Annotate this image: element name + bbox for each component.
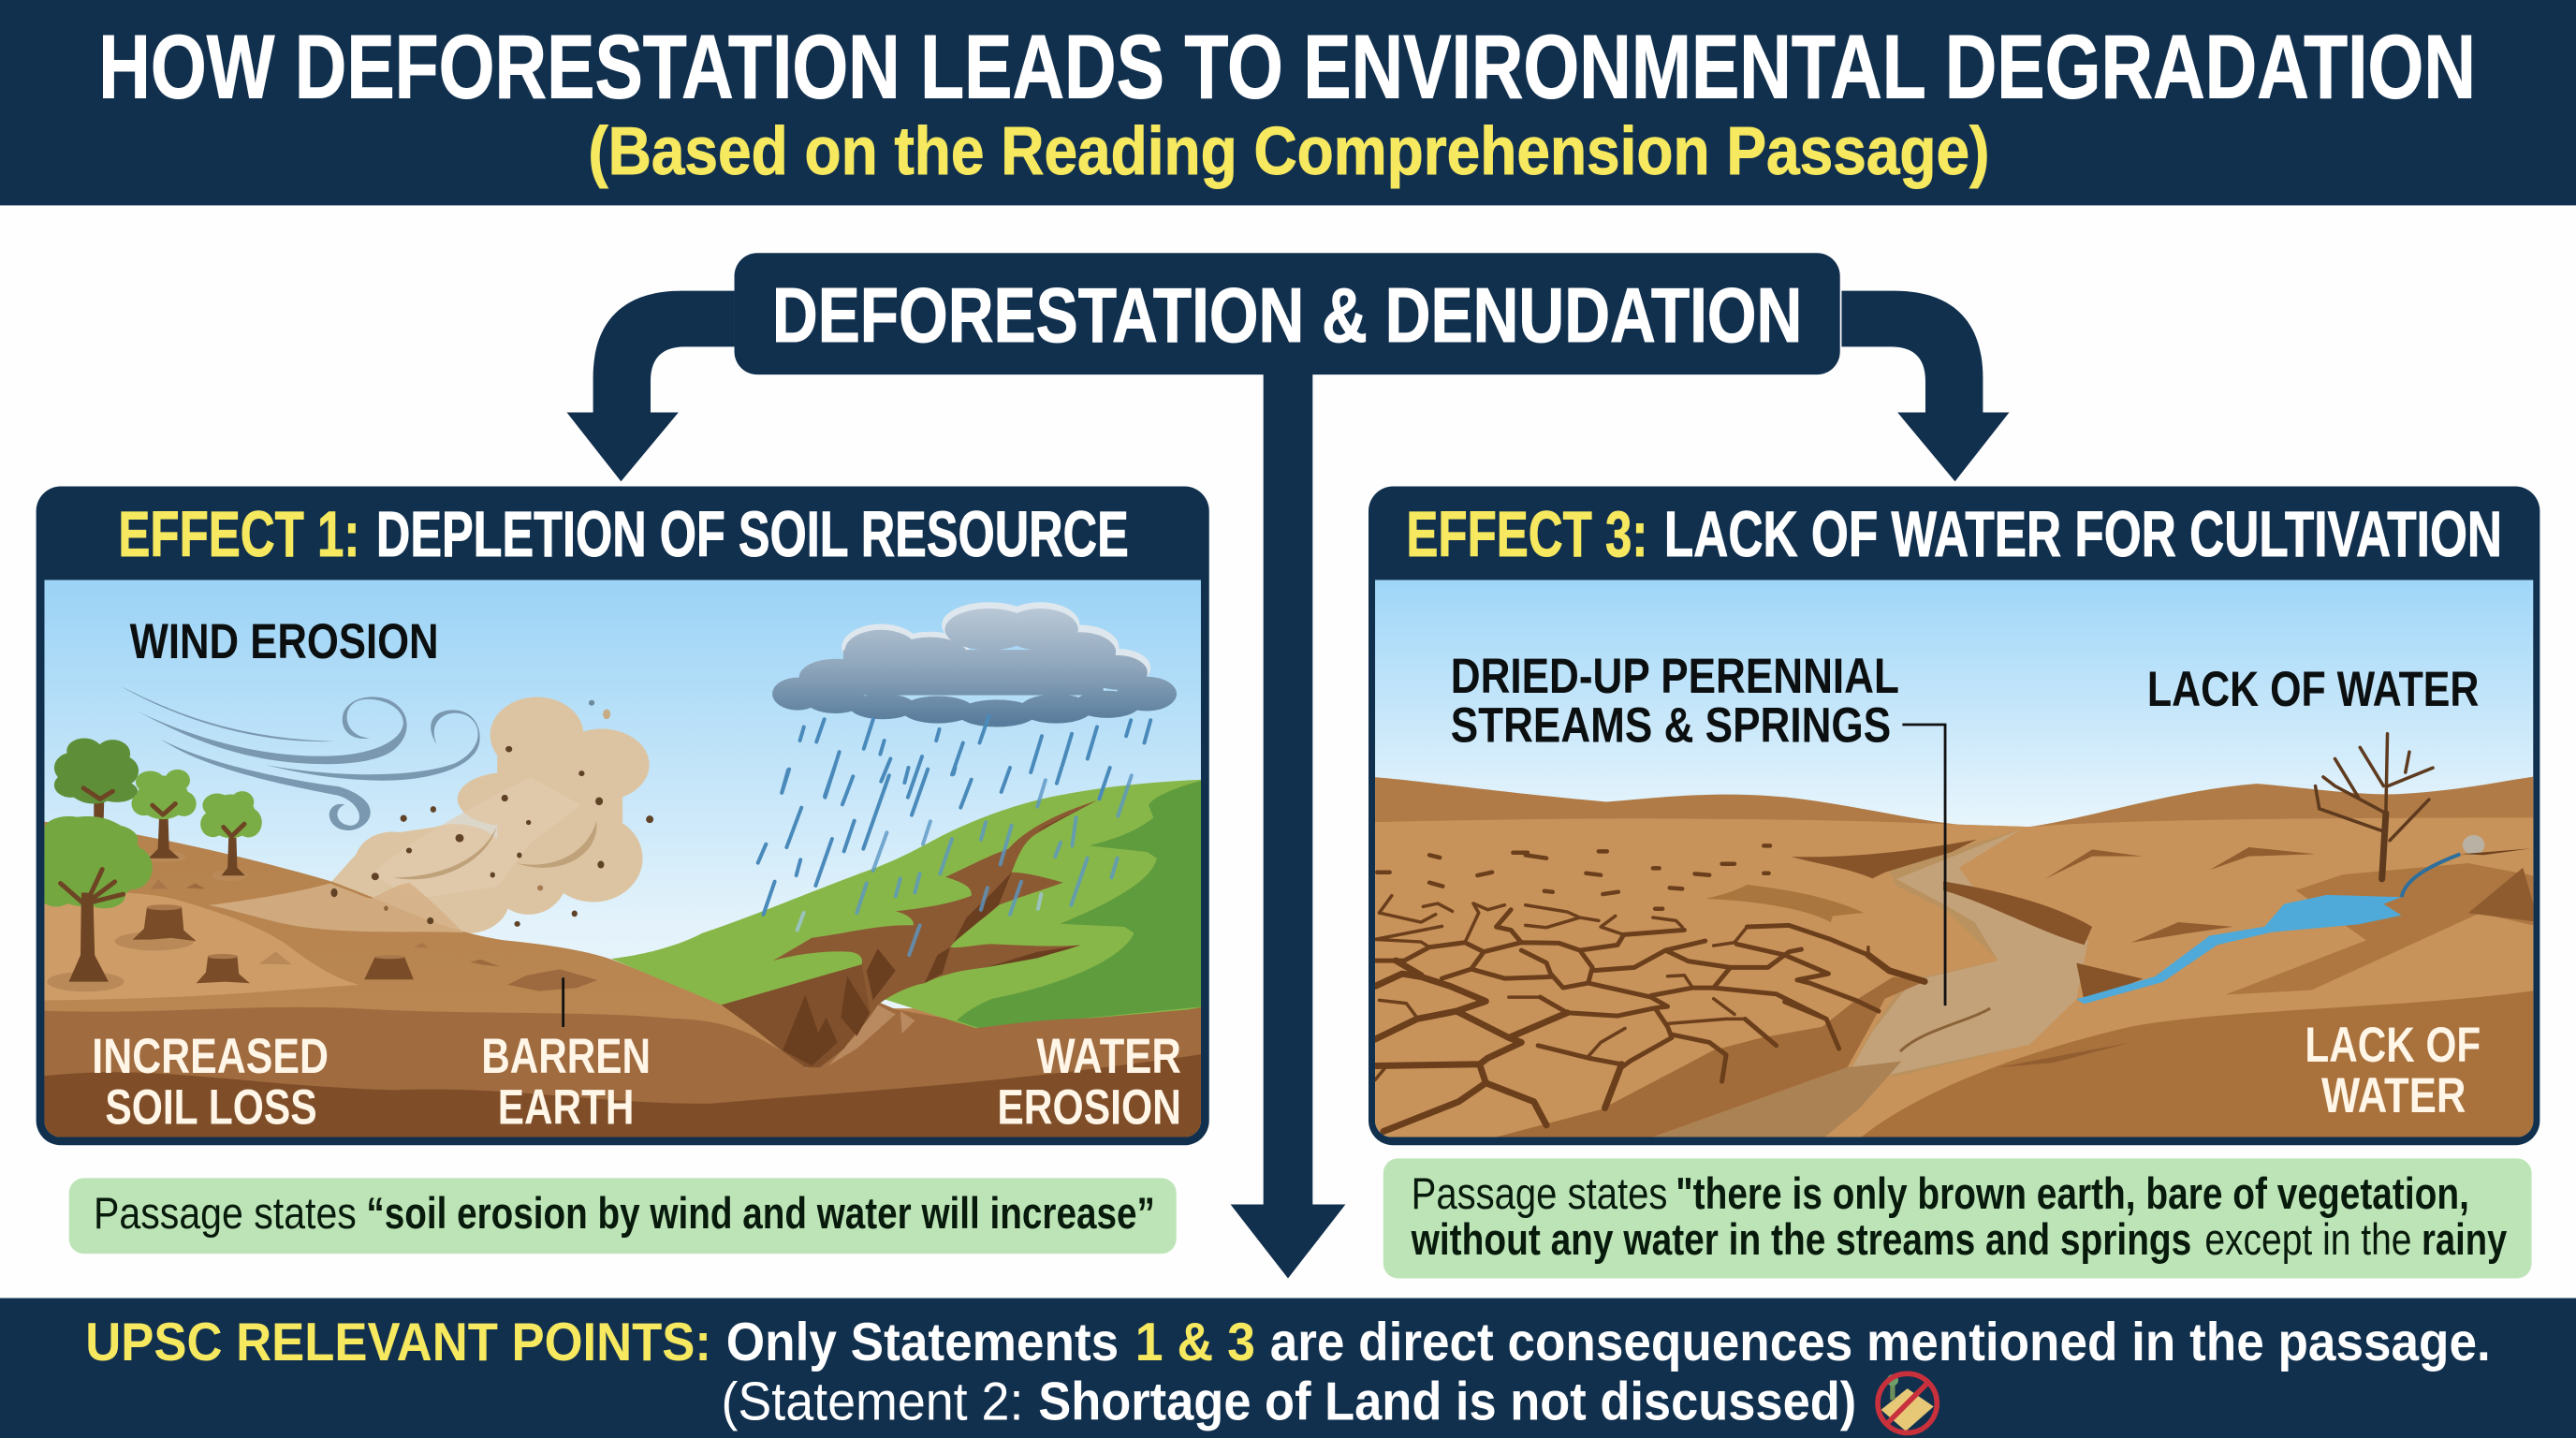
pointer: streams — [1902, 725, 1945, 1005]
icon: no land — [1878, 1373, 1937, 1432]
dark band below cracked land — [1488, 976, 1925, 1139]
callout: passage quote effect 3: rainy — [2422, 1215, 2508, 1265]
central cause box — [735, 253, 1840, 374]
footer line 1: UPSC RELEVANT POINTS: — [85, 1313, 711, 1372]
soil cracks — [1375, 896, 1925, 1131]
subtitle: (Based on the Reading Comprehension Passage) — [588, 114, 1989, 189]
label: increased soil loss — [92, 1029, 329, 1135]
footer line 1: Only Statements — [726, 1313, 1119, 1372]
surface ridges right — [1998, 847, 2316, 1067]
icon: trees — [31, 738, 262, 982]
ground below green hill — [975, 1007, 1201, 1137]
callout: passage quote effect 3: without any water in the streams and springs — [1411, 1215, 2191, 1265]
dust cloud — [330, 697, 650, 933]
arrow: right to effect 3 — [1841, 291, 2009, 481]
panel: effect 3 — [1368, 487, 2539, 1145]
effect 1 heading: DEPLETION OF SOIL RESOURCE — [376, 498, 1129, 570]
header banner — [0, 0, 2576, 205]
icon: tree stumps — [133, 907, 414, 983]
pointer: barren earth — [562, 977, 564, 1027]
gully notch backing — [807, 1003, 895, 1072]
label: increased soil loss: INCREASED — [92, 1029, 329, 1084]
panel: effect 1 — [31, 487, 1209, 1173]
label: water erosion: EROSION — [997, 1079, 1181, 1135]
wind, dust and left hill group — [120, 686, 650, 933]
cause label: DEFORESTATION & DENUDATION — [772, 272, 1802, 359]
footer line 2 — [721, 1372, 1856, 1431]
bottom soil band — [39, 1054, 1206, 1140]
icon: wind swirls — [120, 686, 480, 830]
callout: passage quote effect 3: Passage states — [1412, 1169, 1667, 1219]
illustration: dry land — [1371, 580, 2539, 1140]
label: dried-up streams: DRIED-UP PERENNIAL — [1451, 649, 1899, 704]
callout: passage quote effect 1: “soil erosion by wind and water will increase” — [366, 1189, 1155, 1239]
label: lack of water bottom — [2305, 1018, 2481, 1123]
label: wind erosion: WIND EROSION — [130, 614, 439, 669]
label: lack of water bottom: WATER — [2321, 1068, 2466, 1123]
darker lower right ground — [1857, 990, 2539, 1140]
callout: passage quote effect 3 — [1383, 1158, 2532, 1278]
footer line 2: Shortage of Land is not discussed) — [1038, 1372, 1856, 1431]
lighter soil patches — [37, 891, 359, 1001]
label: barren earth — [481, 1029, 651, 1135]
footer banner — [0, 1299, 2576, 1438]
dry riverbed — [1850, 829, 2088, 1077]
icon: dead tree — [2316, 734, 2433, 879]
label: increased soil loss: SOIL LOSS — [105, 1079, 317, 1135]
effect 1 heading — [118, 498, 1129, 570]
label: water erosion — [997, 1029, 1181, 1135]
main ground — [1371, 817, 2539, 1140]
footer line 1: are direct consequences mentioned in the passage. — [1270, 1313, 2491, 1372]
footer line 2: (Statement 2: — [721, 1372, 1023, 1431]
callout: passage quote effect 1 — [69, 1178, 1177, 1254]
callout: passage quote effect 3: except in the — [2204, 1215, 2411, 1265]
icon: rain upper — [782, 715, 1150, 798]
footer line 1: 1 & 3 — [1135, 1313, 1255, 1372]
gully — [722, 800, 1097, 1067]
dark wedge and ridge — [1791, 840, 1977, 878]
label: dried-up streams — [1451, 649, 1899, 753]
effect 1 heading: EFFECT 1: — [118, 498, 359, 570]
label: barren earth: EARTH — [498, 1079, 634, 1135]
arrow: centre downward — [1231, 370, 1345, 1278]
green hill — [611, 780, 1205, 1028]
illustration: soil erosion — [31, 580, 1206, 1173]
icon: storm cloud — [772, 602, 1177, 727]
icon: rain lower — [758, 768, 1132, 955]
footer line 1 — [85, 1313, 2491, 1372]
label: dried-up streams: STREAMS & SPRINGS — [1451, 697, 1891, 753]
label: lack of water top: LACK OF WATER — [2147, 662, 2479, 717]
far hills — [1371, 776, 2539, 831]
ground shadows — [47, 852, 247, 991]
dust particles — [330, 700, 653, 927]
label: barren earth: BARREN — [481, 1029, 651, 1084]
mid soil band — [39, 1007, 1206, 1140]
effect 3 heading: EFFECT 3: — [1406, 498, 1647, 570]
barren patch and mounds — [151, 880, 597, 991]
water pool — [2076, 854, 2460, 1004]
label: lack of water bottom: LACK OF — [2305, 1018, 2481, 1073]
left eroded hill — [39, 821, 1206, 1140]
arrow: left to effect 1 — [567, 291, 735, 481]
right dark shaded ground — [2225, 863, 2539, 995]
callout: passage quote effect 1: Passage states — [94, 1189, 357, 1239]
soil specks — [1377, 845, 1770, 909]
label: water erosion: WATER — [1036, 1029, 1181, 1084]
